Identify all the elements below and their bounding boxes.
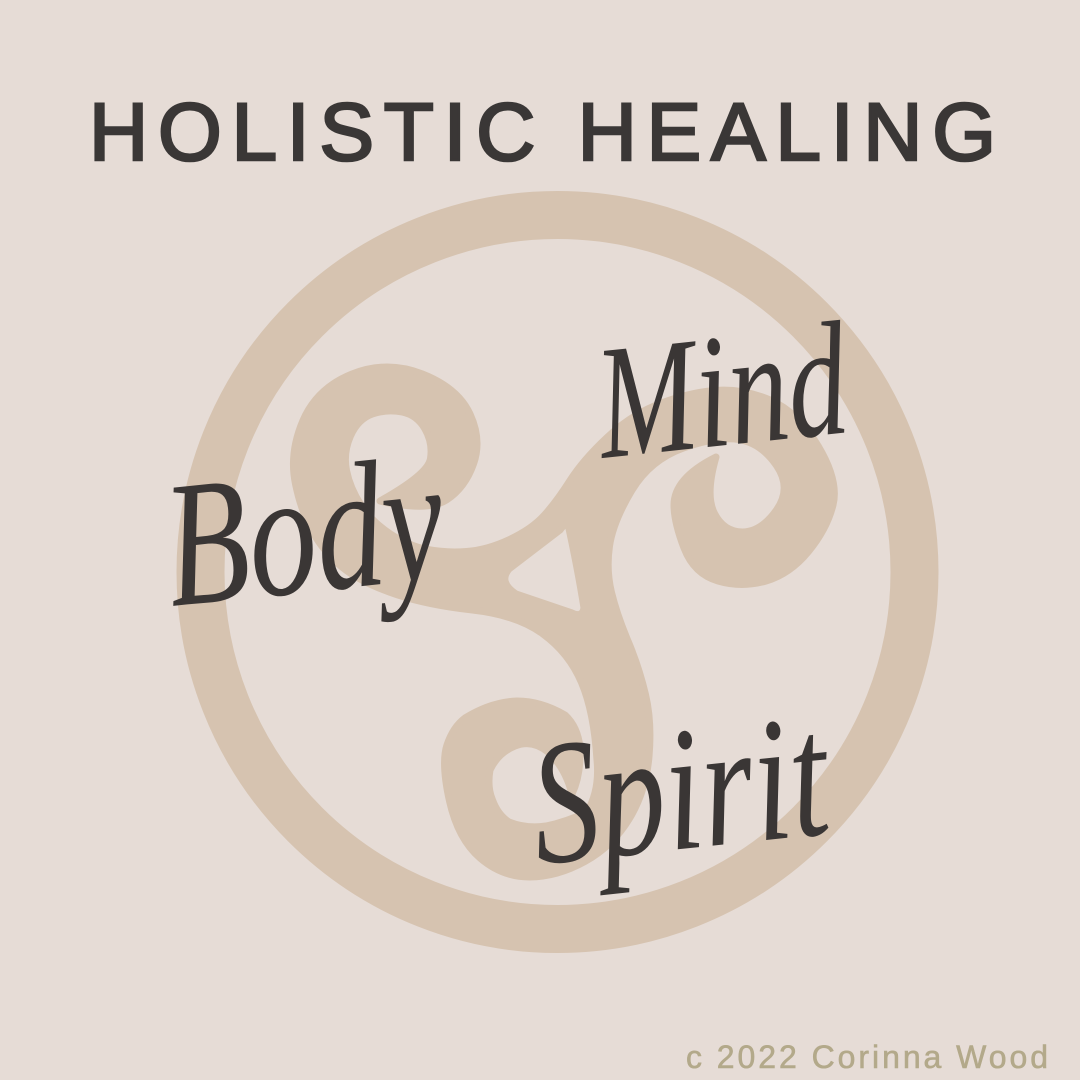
outer ring — [200, 215, 914, 929]
title: HOLISTIC HEALING — [89, 87, 996, 178]
icon: triskele symbol — [200, 215, 914, 929]
copyright credit: c 2022 Corinna Wood — [686, 1039, 1048, 1075]
label: Mind: Mind — [586, 289, 856, 494]
triple spiral — [293, 367, 834, 877]
label: Spirit: Spirit — [522, 676, 839, 903]
label: Body: Body — [155, 419, 453, 646]
